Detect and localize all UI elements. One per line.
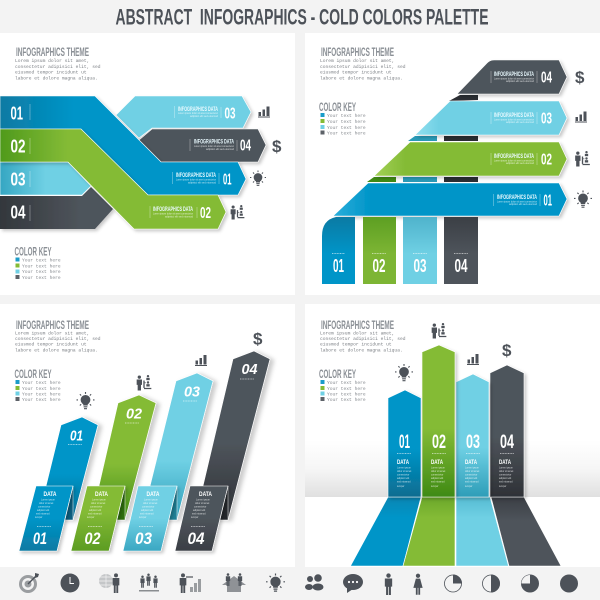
icon: dollar: $ [502, 341, 512, 360]
column 04 [490, 365, 524, 497]
left numbers: 03 [10, 168, 26, 190]
wall shadow [305, 440, 600, 497]
column numbers: 03 [414, 256, 426, 276]
band 03 [415, 101, 567, 135]
icon: bars [195, 355, 207, 366]
column text: sed eiusmod [431, 480, 445, 484]
label: 03: Lorem ipsum dolor sit amet consectetur [178, 112, 218, 115]
arrow 03: consectetur [142, 506, 155, 508]
column text: Lorem ipsum [499, 466, 513, 470]
label: 04: 04 [541, 70, 552, 86]
label: 02: Lorem ipsum dolor sit amet consectetur [494, 160, 534, 162]
arrow 02: dolor sit amet [91, 502, 106, 505]
arrow 02: 02 [84, 530, 100, 548]
column 01 [322, 217, 355, 284]
label: 02 [491, 152, 552, 168]
left numbers: 01 [10, 102, 23, 124]
band 04 [457, 60, 567, 94]
column text: sed eiusmod [499, 480, 513, 484]
arrow 03: DATA [146, 491, 160, 498]
label: 03: INFOGRAPHICS DATA [494, 113, 534, 119]
color key: Your text here [22, 392, 61, 398]
arrow 01: 01 [33, 530, 47, 548]
color key: Your text here [22, 258, 61, 264]
label: 03: Lorem ipsum dolor sit amet consectetur [494, 118, 534, 122]
body text: consectetur adipisici elit, sed [320, 64, 406, 70]
label: 04: adipisici elit sed eiusmod [206, 148, 235, 151]
color key: Your text here [327, 397, 366, 403]
color key [14, 369, 61, 403]
color key: Your text here [327, 380, 366, 386]
column 03 [456, 374, 489, 497]
arrow 01: tempor [35, 516, 43, 519]
body text: labore et dolore magna aliqua. [15, 348, 98, 354]
folded strips between bands [367, 95, 478, 182]
color key: Your text here [327, 113, 366, 119]
label: 02: 02 [541, 152, 552, 168]
column text: Lorem ipsum [465, 466, 479, 470]
column text: DATA [465, 459, 477, 466]
color key: COLOR KEY [319, 102, 356, 114]
heading: INFOGRAPHICS THEME [321, 320, 394, 332]
color key: COLOR KEY [14, 246, 52, 258]
icon: dollar: $ [253, 330, 263, 348]
icon: org chart [432, 323, 446, 338]
body text: eiusmod tempor incidunt ut [15, 342, 87, 348]
arrow 02 [71, 395, 156, 551]
label: 04 [190, 138, 251, 154]
label: 03: INFOGRAPHICS DATA [178, 107, 218, 113]
icon: org chart [137, 375, 151, 390]
arrow 01 [19, 417, 98, 551]
arrow 04: sed eiusmod [192, 512, 206, 516]
icon: podium people [139, 573, 159, 592]
arrow 03: adipisici elit [141, 509, 154, 512]
label: 03 [174, 106, 236, 122]
icon: people group [305, 574, 324, 590]
arrow 04 [175, 351, 270, 551]
body text: Lorem ipsum dolor sit amet, [15, 330, 89, 336]
label: 04 [491, 70, 552, 86]
column 04 [444, 217, 478, 284]
label: 02: INFOGRAPHICS DATA [494, 154, 534, 160]
arrow 02: 02 [126, 406, 143, 422]
label: 01: Lorem ipsum dolor sit amet consectetur [176, 178, 216, 182]
icon: bars [467, 354, 479, 365]
column text: consectetur [431, 474, 444, 476]
ribbon: green [0, 129, 226, 229]
label: 02: adipisici elit sed eiusmod [165, 216, 194, 218]
body text: labore et dolore magna aliqua. [320, 76, 403, 82]
column text: sed eiusmod [465, 480, 479, 484]
heading: INFOGRAPHICS THEME [16, 320, 89, 332]
label: 01 [494, 192, 552, 210]
column text: Lorem ipsum [431, 466, 445, 470]
color key: COLOR KEY [14, 369, 52, 381]
color key: Your text here [22, 264, 61, 270]
column 03 [403, 217, 437, 284]
label: 02 [150, 205, 211, 222]
color key: Your text here [327, 392, 366, 398]
icon: bars [258, 106, 270, 118]
arrow 02: consectetur [90, 506, 103, 508]
column text: DATA [397, 459, 409, 466]
body text [15, 330, 101, 354]
column text: 02 [432, 432, 446, 453]
column numbers: 01 [333, 256, 344, 276]
arrow 03 [123, 373, 213, 551]
icon: team with arrow [222, 573, 246, 592]
label: 03: adipisici elit sed eiusmod [190, 115, 219, 118]
column text: 03 [466, 432, 480, 453]
band 01 [333, 183, 567, 216]
body text: Lorem ipsum dolor sit amet, [15, 58, 89, 64]
color key: Your text here [22, 275, 61, 281]
left numbers: 02 [10, 136, 26, 156]
color key: Your text here [327, 125, 366, 131]
icon: bulb [574, 190, 592, 208]
ribbon: light blue left [0, 162, 91, 195]
panel: top-left woven ribbons [0, 33, 295, 295]
column text: 01 [399, 432, 410, 453]
label: 02: INFOGRAPHICS DATA [153, 207, 193, 213]
icon: woman [413, 574, 423, 595]
column text: consectetur [499, 474, 512, 476]
column text: adipisici elit [397, 477, 410, 480]
left numbers: 04 [10, 202, 26, 222]
arrow 04: 04 [188, 530, 204, 548]
panel: top-right stacked ribbons [305, 33, 600, 295]
label: 01: 01 [544, 192, 552, 210]
panel: bottom-right columns on floor [305, 304, 600, 567]
icon: bars [575, 112, 587, 122]
column text: adipisici elit [431, 477, 444, 480]
ribbon: dark right [139, 129, 266, 162]
label: 02: adipisici elit sed eiusmod [506, 162, 535, 165]
icon: org chart [575, 151, 590, 166]
body text: eiusmod tempor incidunt ut [320, 70, 392, 76]
label: 01: adipisici elit sed eiusmod [509, 203, 538, 206]
icon: pie quarter [444, 574, 462, 592]
column text: dolor sit amet [465, 470, 480, 473]
column text: DATA [431, 459, 443, 466]
arrow 02: tempor [87, 516, 95, 519]
color key: Your text here [22, 380, 61, 386]
column numbers: 02 [372, 256, 386, 276]
column text: sed eiusmod [397, 480, 411, 484]
label: 02: 02 [200, 205, 211, 222]
color key [319, 369, 366, 403]
column text: consectetur [397, 474, 410, 476]
body text: labore et dolore magna aliqua. [15, 76, 98, 82]
icon: globe and man [99, 573, 119, 593]
color key: Your text here [22, 269, 61, 275]
body text: Lorem ipsum dolor sit amet, [320, 330, 394, 336]
icon: pie three quarters [521, 574, 539, 592]
column text [397, 432, 514, 488]
label: 01: INFOGRAPHICS DATA [497, 195, 537, 201]
color key [14, 246, 61, 281]
arrow 01: consectetur [38, 506, 51, 508]
label: 01 [172, 172, 232, 188]
body text: eiusmod tempor incidunt ut [320, 342, 392, 348]
icon: bulb [266, 574, 285, 592]
column text: tempor [499, 485, 507, 488]
panel: bottom-left rising arrows [0, 304, 295, 567]
icon: dollar: $ [575, 68, 585, 87]
icon: speech bubble [343, 574, 363, 593]
label: 03: 03 [541, 110, 552, 128]
label: 01: adipisici elit sed eiusmod [188, 182, 217, 184]
color key: Your text here [22, 397, 61, 403]
body text: Lorem ipsum dolor sit amet, [320, 58, 394, 64]
floor bands [350, 497, 561, 566]
column text: tempor [465, 485, 473, 488]
arrow 04: DATA [199, 491, 212, 498]
body text [320, 58, 406, 82]
arrow 03: tempor [139, 516, 147, 519]
label: 01: INFOGRAPHICS DATA [176, 173, 216, 179]
body text: consectetur adipisici elit, sed [15, 336, 101, 342]
column 02 [422, 345, 455, 497]
arrow 03: 03 [184, 384, 201, 400]
column text: dolor sit amet [397, 470, 412, 473]
column numbers [332, 254, 468, 276]
icon row [19, 573, 578, 595]
color key: Your text here [327, 119, 366, 125]
icon: presenter with chart [180, 573, 201, 593]
label: 03 [491, 110, 552, 128]
label: 04: INFOGRAPHICS DATA [494, 72, 534, 78]
column text: tempor [397, 485, 405, 488]
column numbers: 04 [454, 256, 468, 276]
arrow 04: consectetur [194, 506, 207, 508]
arrow 02: sed eiusmod [88, 512, 102, 516]
left numbers [10, 102, 30, 222]
icon: dollar: $ [272, 137, 282, 156]
color key [319, 102, 366, 136]
column text: adipisici elit [465, 477, 478, 480]
arrow 04: tempor [191, 516, 199, 519]
icon: org chart [231, 205, 244, 220]
label: 01: Lorem ipsum dolor sit amet consectetur [497, 200, 537, 204]
arrow 04: Lorem ipsum [196, 498, 210, 502]
arrow 03: dolor sit amet [143, 502, 158, 505]
ribbon: blue [0, 96, 246, 195]
label: 04: Lorem ipsum dolor sit amet consectetur [194, 145, 234, 148]
arrow 03: 03 [135, 530, 152, 548]
arrow 01: adipisici elit [37, 509, 50, 512]
column text: dolor sit amet [431, 470, 446, 473]
body text: consectetur adipisici elit, sed [15, 64, 101, 70]
body text [320, 330, 406, 354]
ribbon: light blue right [116, 96, 251, 138]
heading: INFOGRAPHICS THEME [321, 47, 394, 59]
color key: Your text here [22, 386, 61, 392]
label: 04: INFOGRAPHICS DATA [194, 140, 234, 146]
label: 03: 03 [224, 106, 236, 122]
body text: consectetur adipisici elit, sed [320, 336, 406, 342]
arrow 04: adipisici elit [193, 509, 206, 512]
icon: clock [60, 574, 80, 592]
column 01 [388, 390, 421, 497]
label: 02: Lorem ipsum dolor sit amet consectetur [153, 212, 193, 216]
column text: adipisici elit [499, 477, 512, 480]
icon: man [385, 573, 392, 595]
band 02 [374, 142, 567, 176]
color key: COLOR KEY [319, 369, 356, 381]
arrow 02: Lorem ipsum [92, 498, 106, 502]
label: 03: adipisici elit sed eiusmod [506, 121, 535, 124]
arrow 01: DATA [44, 491, 57, 498]
column text: DATA [499, 459, 511, 466]
column 02 [363, 217, 396, 284]
arrow 01: dolor sit amet [39, 502, 54, 505]
color key: Your text here [327, 386, 366, 392]
column text: 04 [500, 432, 514, 453]
label: 04: Lorem ipsum dolor sit amet consectetur [494, 78, 534, 80]
icon: bulb [76, 392, 94, 409]
arrow 02: adipisici elit [89, 509, 102, 512]
ribbon: dark left [0, 187, 113, 229]
label: 04: 04 [240, 138, 251, 154]
icon: pie half [482, 574, 500, 592]
arrow 04: 04 [242, 361, 258, 378]
icon: full circle [560, 574, 578, 592]
column text: consectetur [465, 474, 478, 476]
body text: eiusmod tempor incidunt ut [15, 70, 87, 76]
heading: INFOGRAPHICS THEME [16, 47, 89, 59]
arrow 03: Lorem ipsum [144, 498, 158, 502]
column text: dolor sit amet [499, 470, 514, 473]
icon: target [19, 573, 39, 593]
arrow 01: Lorem ipsum [41, 498, 55, 502]
label: 01: 01 [223, 172, 232, 188]
arrow 03: sed eiusmod [140, 512, 154, 516]
arrow 04: dolor sit amet [195, 502, 210, 505]
color key: Your text here [327, 130, 366, 136]
icon: bulb [395, 364, 413, 381]
arrow 01: sed eiusmod [36, 512, 50, 516]
body text: labore et dolore magna aliqua. [320, 348, 403, 354]
body text [15, 58, 101, 82]
icon: bulb [250, 170, 266, 186]
label: 04: adipisici elit sed eiusmod [506, 80, 535, 83]
arrow 01: 01 [70, 428, 83, 444]
column text: Lorem ipsum [397, 466, 411, 470]
arrow 02: DATA [95, 491, 108, 498]
column text: tempor [431, 485, 439, 488]
